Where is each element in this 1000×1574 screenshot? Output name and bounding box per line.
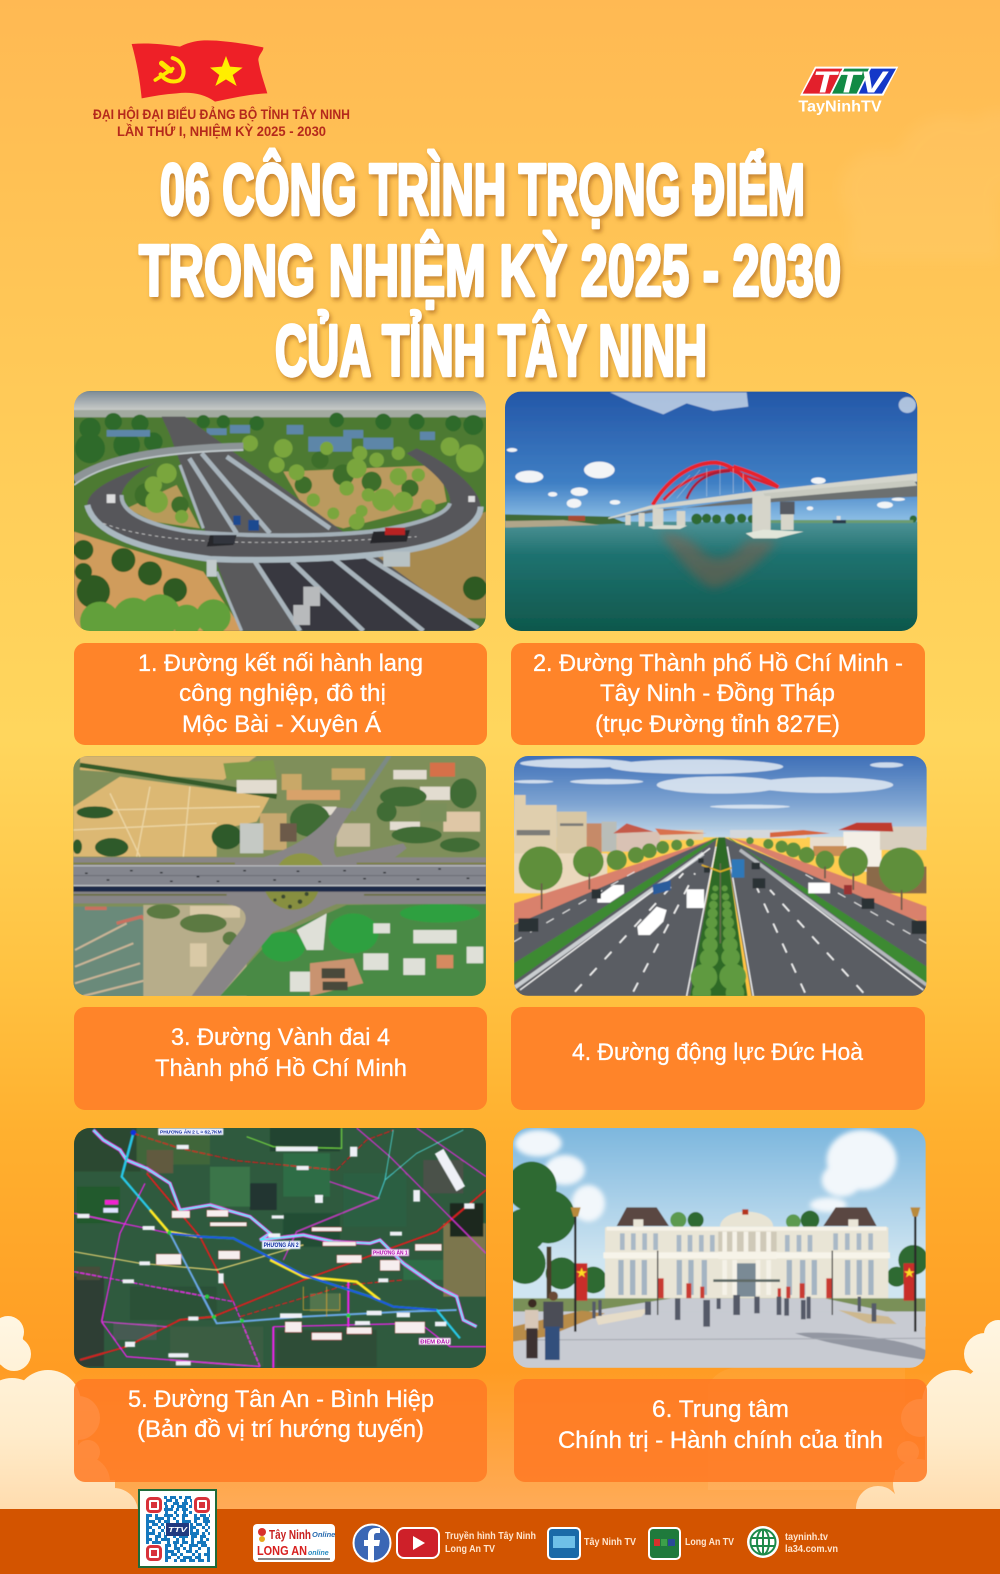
- congress name: LẦN THỨ I, NHIỆM KỲ 2025 - 2030: [117, 124, 326, 139]
- panel: project 5 photo, route map: [70, 1120, 490, 1373]
- panel: project 5 caption: 5. Đường Tân An - Bình Hiệp: [128, 1386, 434, 1413]
- panel: project 2 caption: (trục Đường tỉnh 827E): [595, 711, 840, 738]
- logo: TTV: TayNinhTV: [798, 99, 882, 116]
- text: Truyền hình Tây Ninh, Long An TV: Truyền hình Tây Ninh: [445, 1530, 536, 1542]
- QR code: [139, 1490, 216, 1567]
- panel: project 1 caption: Mộc Bài - Xuyên Á: [182, 711, 381, 738]
- logo: party flag and congress name: [93, 40, 350, 139]
- panel: project 1 photo, interchange: [70, 385, 490, 642]
- route labels: PHƯƠNG ÁN 1: [373, 1250, 408, 1257]
- panel: project 4 caption: 4. Đường động lực Đức Hoà: [572, 1039, 864, 1066]
- faint clouds top right: [840, 110, 1000, 260]
- panel: project 6 caption: [514, 1379, 927, 1482]
- text: websites: tayninh.tv: [785, 1531, 828, 1543]
- panel: project 2 caption: [511, 643, 925, 745]
- route labels: PHƯƠNG ÁN 2: [264, 1242, 299, 1249]
- panel: project 3 caption: Thành phố Hồ Chí Minh: [155, 1055, 407, 1082]
- icon: Long An TV channel: [649, 1528, 680, 1559]
- cloud: bottom right: [856, 1320, 1000, 1530]
- panel: project 3 caption: [74, 1007, 487, 1110]
- icon: hammer and sickle: [155, 58, 184, 82]
- icon: YouTube: [397, 1528, 439, 1558]
- icon: Tây Ninh TV channel: [548, 1528, 580, 1559]
- panel: project 1 caption: công nghiệp, đô thị: [179, 680, 386, 707]
- congress name: ĐẠI HỘI ĐẠI BIỂU ĐẢNG BỘ TỈNH TÂY NINH: [93, 107, 350, 122]
- QR code: TTV: [168, 1527, 189, 1534]
- congress name: [93, 107, 350, 139]
- title: [139, 150, 841, 392]
- logo: Tây Ninh Online, Long An Online: Tây Ninh: [269, 1527, 311, 1542]
- panel: project 2 photo, red arch bridge: [500, 385, 930, 635]
- title: CỦA TỈNH TÂY NINH: [275, 310, 707, 392]
- cloud behind bottom row: [708, 1367, 905, 1490]
- icon: star: [210, 56, 243, 86]
- text: Long An TV: Long An TV: [685, 1536, 734, 1548]
- logo: TTV: TTV: [813, 65, 889, 99]
- text: Tây Ninh TV: Tây Ninh TV: [584, 1536, 636, 1548]
- panel: project 2 caption: Tây Ninh - Đồng Tháp: [600, 680, 835, 707]
- icon: flag: [132, 40, 267, 102]
- text: Truyền hình Tây Ninh, Long An TV: Long An TV: [445, 1543, 495, 1555]
- icon: Facebook: [354, 1524, 390, 1562]
- panel: project 4 caption: [511, 1007, 925, 1110]
- icon: globe: [747, 1526, 779, 1558]
- panel: project 3 photo, ring road aerial: [70, 750, 490, 1000]
- text: Truyền hình Tây Ninh, Long An TV: [445, 1530, 536, 1555]
- panel: project 6 photo, administrative centre: [503, 1120, 935, 1368]
- logo: Tây Ninh Online, Long An Online: Online: [312, 1530, 335, 1539]
- panel: project 6 caption: Chính trị - Hành chính của tỉnh: [558, 1427, 883, 1454]
- logo: Tây Ninh Online, Long An Online: [253, 1524, 335, 1562]
- footer bar: [0, 1490, 1000, 1574]
- panel: project 5 caption: [74, 1379, 487, 1482]
- panel: project 1 caption: [74, 643, 487, 745]
- route labels: ĐIỂM ĐẦU: [420, 1338, 450, 1345]
- route labels: [160, 1129, 450, 1345]
- panel: project 6 caption: 6. Trung tâm: [652, 1396, 789, 1423]
- logo: Tây Ninh Online, Long An Online: online: [308, 1550, 329, 1557]
- panel: project 1 caption: 1. Đường kết nối hành lang: [138, 650, 423, 677]
- panel: project 5 caption: (Bản đồ vị trí hướng tuyến): [137, 1416, 424, 1443]
- logo: Tây Ninh Online, Long An Online: LONG AN: [257, 1543, 307, 1558]
- panel: project 2 caption: 2. Đường Thành phố Hồ Chí Minh -: [533, 650, 903, 677]
- text: websites: [785, 1531, 838, 1555]
- logo: TTV: [798, 65, 898, 116]
- panel: project 4 photo, boulevard: [510, 750, 930, 1002]
- route labels: PHƯƠNG ÁN 2 L ≈ 62,7KM: [160, 1129, 222, 1136]
- cloud: bottom left: [0, 1316, 138, 1536]
- panel: project 3 caption: 3. Đường Vành đai 4: [171, 1024, 390, 1051]
- text: websites: la34.com.vn: [785, 1543, 838, 1555]
